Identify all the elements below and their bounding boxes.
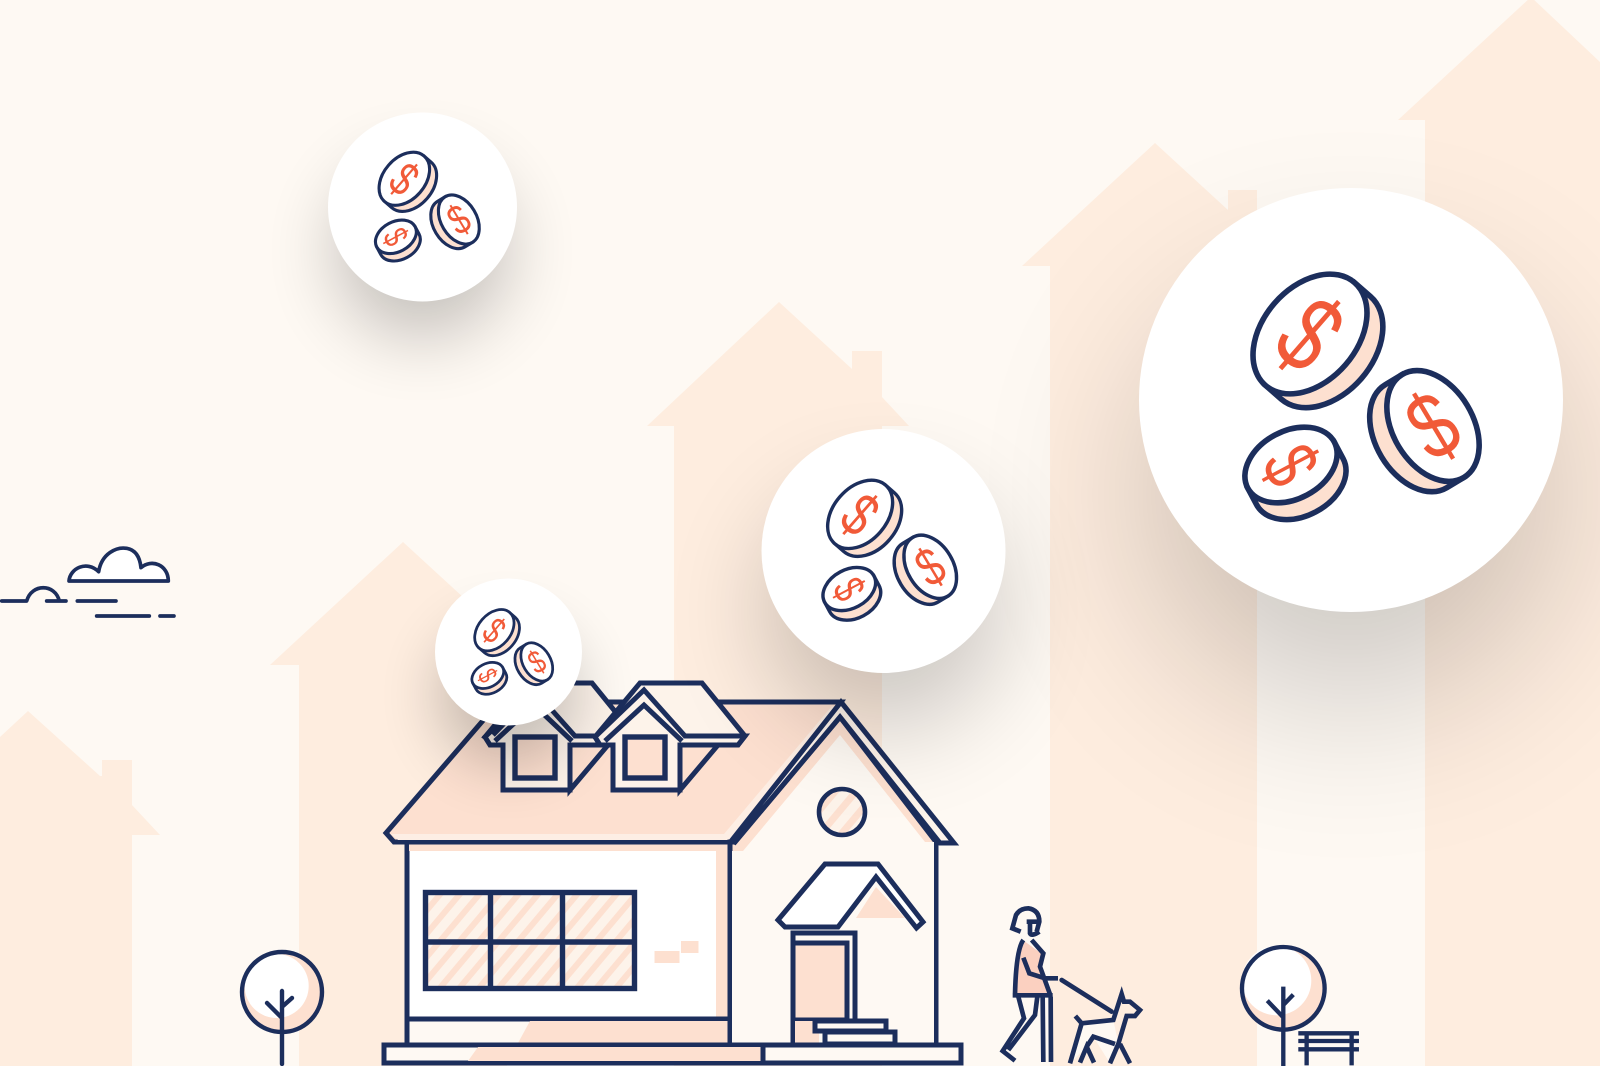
door (793, 933, 855, 1045)
wall shading (409, 844, 728, 1017)
coin: $ (827, 480, 892, 549)
coin: $ (906, 536, 956, 599)
tree (1242, 946, 1325, 1066)
coin (1351, 354, 1498, 508)
right dormer (595, 683, 745, 790)
coin circle small (435, 578, 582, 726)
porch shadow (856, 887, 905, 918)
left dormer (485, 683, 635, 790)
shadow small circle (438, 625, 578, 765)
coins icon (467, 602, 559, 700)
left wall (407, 842, 730, 1045)
coin (816, 559, 888, 629)
coin: $ (375, 222, 415, 252)
house (384, 683, 961, 1063)
coins icon (814, 468, 967, 629)
silhouette house 1 (0, 711, 160, 1066)
coin: $ (474, 610, 513, 652)
distant hill (2, 588, 174, 616)
coin: $ (1388, 370, 1477, 481)
foundation (384, 1045, 961, 1063)
drop shadows of the coin circles (336, 164, 1556, 765)
coin: $ (522, 644, 553, 682)
gable fill (732, 735, 934, 1043)
silhouette house 5 (1398, 0, 1600, 1066)
silhouette house 3 (647, 302, 909, 1066)
coin: $ (822, 570, 874, 609)
dog (1070, 994, 1140, 1063)
round attic window (819, 789, 865, 835)
porch roof (778, 864, 923, 928)
coin circle medium (762, 429, 1006, 673)
silhouette house 2 (270, 542, 536, 1066)
coin (1230, 252, 1406, 430)
ground floor window (425, 892, 635, 989)
coins icon (369, 142, 488, 268)
shadow medium circle (765, 492, 1001, 728)
woman (1003, 908, 1058, 1062)
coin: $ (1253, 274, 1366, 395)
tree left (242, 952, 322, 1064)
woman walking dog (1003, 908, 1140, 1063)
cloud (69, 548, 168, 581)
coin: $ (439, 194, 479, 244)
main roof (386, 702, 841, 842)
cloud and horizon lines (2, 548, 174, 616)
roof lower highlight (391, 706, 838, 840)
coin (814, 468, 915, 569)
silhouette house 4 (1022, 143, 1287, 1066)
gable wall (730, 717, 936, 1045)
leash (1062, 980, 1112, 1012)
coin (1232, 412, 1359, 535)
porch steps (815, 1021, 895, 1044)
coin circle large (1139, 188, 1563, 612)
gable fascia (732, 702, 954, 843)
coin (883, 526, 967, 614)
lower wall band (407, 1019, 730, 1045)
bench (1298, 1033, 1359, 1065)
coins icon (1230, 252, 1498, 535)
coin circle top (328, 112, 517, 302)
shadow large circle (1146, 290, 1556, 700)
tree and bench right (1242, 946, 1359, 1066)
coin: $ (379, 152, 429, 206)
brick marks (654, 941, 933, 968)
shadow top circle (336, 164, 508, 336)
coin: $ (472, 664, 503, 687)
coin: $ (1245, 431, 1336, 500)
